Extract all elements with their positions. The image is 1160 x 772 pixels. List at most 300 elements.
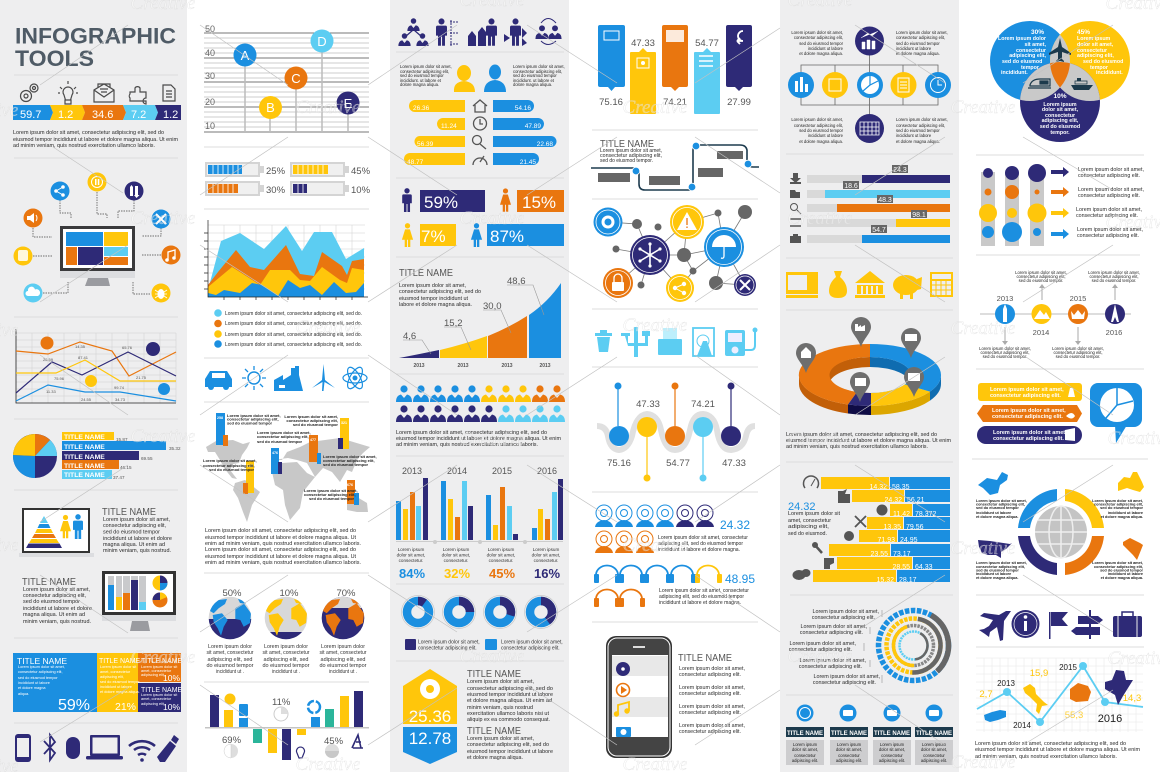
icon: woman	[454, 65, 475, 92]
text block: ad minim veniam, quis nostrud exercitation ullamco laboris.	[786, 444, 928, 450]
text block: enim ad minim veniam, quis nostrud exercitation ullamco laboris.	[205, 541, 361, 547]
globe 10%: sit amet, consectetur	[262, 650, 310, 656]
map line chart: 2,7	[979, 689, 993, 700]
text block: intro: Lorem ipsum dolor sit amet, consectetur adipiscing elit, sed do	[13, 130, 164, 136]
process path timeline	[591, 139, 759, 191]
four title name cards: adipiscing elit.	[879, 758, 905, 763]
bubble column chart with arrows: consectetur adipiscing elit.	[1078, 193, 1140, 199]
globe 10%	[262, 588, 310, 675]
text block: hexagon titles: eiusmod tempor incididunt ut labore	[467, 692, 553, 698]
panel: gender comparison bars: 47.89	[525, 123, 541, 130]
globe with country maps: Lorem ipsum dolor sit amet,	[976, 499, 1027, 503]
org chart: consectetur adipiscing elit,	[896, 123, 945, 128]
panel: gender comparison bars: dolore magna aliqua.	[400, 82, 439, 87]
venn diagram: 10%	[1053, 93, 1067, 100]
batteries: 10%	[351, 185, 371, 196]
growth area chart: 2013	[457, 363, 469, 369]
pictogram: webcams: adipiscing elit, sed do eiusmod tempor	[658, 541, 743, 547]
world map with bars: Lorem ipsum dolor sit amet,	[257, 430, 311, 435]
grouped bar chart 2013-2016: consectetur.	[399, 558, 423, 563]
panel: people percentage bars: 87%	[490, 227, 524, 246]
bubble lollipop chart: D	[317, 34, 327, 49]
text block: sed do eiusmod tempor	[23, 599, 80, 605]
batteries	[205, 162, 371, 196]
globe 10%: Lorem ipsum dolor	[264, 644, 308, 650]
globe with country maps: et dolore magna aliqua.	[1101, 515, 1143, 519]
text block: hexagon titles: et dolore magna aliqua.	[467, 755, 523, 761]
text block: minim veniam, quis nostrud.	[103, 548, 171, 554]
panel: gender comparison bars: 22.68	[537, 141, 553, 148]
map line chart: 2015	[1059, 663, 1077, 672]
panel: gender comparison bars: sed do eiusmod tempor	[513, 73, 557, 78]
org chart: Lorem ipsum dolor sit amet,	[791, 30, 843, 35]
growth area chart: 30,0	[483, 301, 502, 312]
text block: incididunt ut labore et dolore	[23, 606, 92, 612]
area chart	[204, 220, 368, 348]
icons: house, clock, search, gauge	[472, 100, 487, 165]
snake timeline: 75.16	[607, 458, 631, 469]
banners: Lorem ipsum dolor sit amet,	[992, 408, 1066, 414]
line chart: 26.59	[43, 357, 54, 362]
world map with bars: 321	[341, 421, 347, 425]
globe with country maps: consectetur adipiscing elit,	[976, 502, 1025, 506]
venn diagram: adipiscing elit,	[1009, 53, 1047, 59]
text block: Lorem ipsum dolor sit amet,	[103, 517, 170, 523]
location pins	[796, 317, 924, 402]
pictogram: headphones: adipiscing elit, sed do eiusmod tempor	[659, 594, 744, 600]
growth area chart: 48,6	[507, 276, 526, 287]
stacked comparison bars: 73.17	[893, 551, 911, 558]
org chart: sed do eiusmod tempor	[896, 128, 940, 133]
text block: phone: Lorem ipsum dolor sit amet,	[679, 723, 745, 729]
bubble lollipop chart: 40	[205, 48, 215, 58]
venn diagram: consectetur	[1016, 48, 1046, 54]
four title name cards: consectetur	[881, 753, 903, 758]
horizontal range bars: 98.1	[912, 212, 926, 219]
banners: consectetur adipiscing elit.	[992, 414, 1063, 420]
stacked comparison bars	[788, 476, 950, 584]
four title name cards: TITLE NAME	[787, 731, 823, 737]
text block: hexagon titles: Lorem ipsum dolor sit amet,	[467, 736, 534, 742]
horizontal timeline: sed do eiusmod tempor.	[1056, 354, 1100, 359]
horizontal timeline: 2014	[1033, 328, 1049, 337]
legend: Lorem ipsum dolor sit amet, consectetur adipiscing elit, sed do.	[225, 311, 362, 317]
horizontal timeline	[979, 270, 1140, 359]
map: USA	[978, 540, 1012, 558]
hexagon badge: 25.36	[409, 707, 451, 726]
watermark marks: Creative	[296, 97, 360, 118]
bubble column chart with arrows: consectetur adipiscing elit.	[1077, 233, 1139, 239]
3D donut chart	[796, 317, 941, 415]
panel: five column cards: 54.77	[695, 38, 719, 49]
globe with country maps: et dolore magna aliqua.	[976, 576, 1018, 580]
line chart: 14.35	[75, 344, 86, 349]
diverging bar chart: 11%	[272, 697, 291, 708]
venn diagram: adipiscing elit,	[1077, 53, 1114, 59]
pictogram: webcams: Lorem ipsum dolor sit amet, consectetur	[658, 535, 748, 541]
org chart	[788, 26, 951, 144]
stacked comparison bars: 28.55	[892, 564, 910, 571]
map line chart: 55,3	[1065, 710, 1083, 721]
globe 70%	[320, 588, 367, 675]
chevron bar: key values	[13, 105, 181, 121]
pictogram: headphones: incididunt ut labore et dolore magna.	[659, 600, 741, 606]
icons: finance row	[786, 271, 953, 299]
growth area chart: 2013	[413, 363, 425, 369]
text block: phone: Lorem ipsum dolor sit amet,	[679, 666, 745, 672]
text block: Lorem ipsum dolor sit amet, consectetur adipiscing elit, sed do	[786, 432, 937, 438]
batteries: 30%	[266, 185, 286, 196]
watermark marks: Creative	[460, 429, 524, 450]
globe 50%: do eiusmod tempor	[206, 663, 254, 669]
panel: treemap	[13, 653, 183, 714]
grouped bar chart 2013-2016: consectetur.	[534, 558, 558, 563]
watermark marks: Creative	[788, 208, 852, 229]
panel: people percentage bars	[402, 188, 564, 247]
stacked comparison bars: 56.21	[907, 497, 925, 504]
bubble column chart with arrows: consectetur adipiscing elit.	[1076, 213, 1138, 219]
text block: intro	[13, 130, 178, 149]
map: India	[1105, 670, 1133, 705]
node: umbrella	[704, 227, 744, 267]
panel: treemap: 59%	[58, 697, 90, 714]
stacked comparison bars: 24.95	[900, 537, 918, 544]
text block: hexagon titles: eiusmod tempor incididunt ut labore	[467, 749, 553, 755]
watermark marks: Creative	[460, 208, 524, 229]
panel: treemap: TITLE NAME	[99, 658, 141, 665]
org chart: Lorem ipsum dolor sit amet,	[896, 30, 948, 35]
globe 70%: incididunt ut .	[329, 669, 357, 675]
globe with country maps: et dolore magna aliqua.	[976, 515, 1018, 519]
globe with country maps: incididunt ut labore	[1108, 572, 1143, 576]
watermark marks: Creative	[788, 429, 852, 450]
watermark marks: Creative	[131, 426, 195, 447]
text block	[23, 587, 92, 625]
arrows	[1051, 167, 1069, 239]
text block: Lorem ipsum dolor sit amet, consectetur adipiscing elit, sed do	[205, 547, 356, 553]
globe 70%: sit amet, consectetur	[320, 650, 367, 656]
globe ring	[1018, 489, 1104, 575]
process path timeline: TITLE NAME	[600, 139, 654, 150]
pie chart with title bars: TITLE NAME	[64, 444, 105, 451]
world map with bars: consectetur adipiscing elit,	[286, 418, 338, 423]
icon: pause	[88, 172, 106, 192]
globe with country maps: incididunt ut labore	[976, 511, 1011, 515]
globe with country maps: consectetur adipiscing elit,	[1094, 502, 1143, 506]
legend: Lorem ipsum dolor sit amet,	[418, 640, 480, 646]
panel: treemap: 10%	[163, 702, 180, 712]
icons: energy row	[205, 364, 367, 391]
venn diagram: sed do eiusmod	[1040, 124, 1080, 130]
panel: treemap: aliqua.	[18, 692, 29, 696]
map: Italy	[1023, 684, 1048, 714]
stacked comparison bars: 15.32	[876, 577, 894, 584]
org chart: consectetur adipiscing elit,	[794, 35, 843, 40]
grouped bar chart 2013-2016: 2016	[537, 466, 557, 476]
icon: share	[50, 182, 70, 200]
panel: gender comparison bars: 56.39	[417, 141, 434, 148]
globe with country maps: et dolore magna aliqua.	[1101, 576, 1143, 580]
grouped bar chart 2013-2016: Lorem ipsum	[533, 547, 559, 552]
panel: gender comparison bars: 26.36	[413, 105, 430, 112]
map: Russia	[984, 710, 1006, 722]
text block: enim ad minim veniam, quis nostrud exercitation ullamco laboris.	[205, 560, 361, 566]
bubble lollipop chart	[204, 24, 369, 132]
org chart: incididunt ut labore	[808, 133, 844, 138]
org chart: consectetur adipiscing elit,	[794, 123, 843, 128]
horizontal timeline: Lorem ipsum dolor sit amet,	[1088, 270, 1140, 275]
globe with country maps: sed do eiusmod tempor	[976, 568, 1019, 572]
world map with bars: consectetur adipiscing elit,	[304, 492, 356, 497]
globe 70%: do eiusmod tempor	[320, 663, 367, 669]
map line chart: 14,3	[1123, 693, 1141, 704]
panel: title and key figures	[13, 24, 181, 158]
map: China	[978, 472, 1008, 495]
bubble lollipop chart: C	[291, 71, 301, 86]
icons: people network row	[398, 18, 562, 46]
banners	[977, 383, 1142, 444]
grouped bar chart 2013-2016: dolor sit amet,	[487, 552, 515, 558]
panel: gender comparison bars: 11.24	[441, 123, 457, 130]
venn diagram: dolor sit amet,	[1077, 42, 1114, 48]
snake timeline	[597, 382, 755, 482]
panel: laptop with pyramid	[19, 507, 172, 557]
watermark marks: Creative	[951, 97, 1015, 118]
panel: gender comparison bars: consectetur adipiscing elit,	[400, 69, 449, 74]
text block: incididunt ut labore et dolore	[103, 536, 172, 542]
watermark marks: Creative	[623, 315, 687, 336]
bubble column chart with arrows: Lorem ipsum dolor sit amet,	[1077, 227, 1143, 233]
radial segmented chart: consectetur adipiscing elit.	[813, 680, 876, 686]
chevron bar: key values: 59.7	[20, 109, 41, 121]
text block: magna aliqua. Ut enim ad	[23, 612, 85, 618]
bubble lollipop chart: 10	[205, 121, 215, 131]
world map with bars: consectetur adipiscing elit,	[323, 458, 375, 463]
text block: consectetur adipiscing elit,	[23, 593, 86, 599]
text block: phone: Lorem ipsum dolor sit amet,	[679, 704, 745, 710]
horizontal timeline: sed do eiusmod tempor.	[1092, 278, 1136, 283]
grouped bar chart 2013-2016: 45%	[489, 566, 515, 581]
org chart: et dolore magna aliqua.	[896, 51, 940, 56]
pictogram: headphones: 48.95	[725, 572, 755, 586]
panel: treemap: incididunt ut labore	[18, 681, 50, 685]
panel: gender comparison bars: 21.45	[520, 159, 536, 166]
panel: treemap: 21%	[115, 701, 136, 713]
text block: hexagon titles: minim veniam, quis nostrud	[467, 705, 533, 711]
snake timeline: 54.77	[666, 458, 690, 469]
heading: TITLE NAME	[22, 577, 76, 588]
panel: gender comparison bars: dolore magna aliqua.	[513, 82, 552, 87]
grouped bar chart 2013-2016: Lorem ipsum	[488, 547, 514, 552]
globe with country maps: incididunt ut labore	[1108, 511, 1143, 515]
panel: treemap: et dolore magna aliqua.	[100, 690, 140, 694]
legend: Lorem ipsum dolor sit amet, consectetur adipiscing elit, sed do.	[225, 342, 362, 348]
process path timeline: sed do eiusmod tempor.	[600, 158, 653, 164]
world map with bars: 477	[310, 438, 316, 442]
monitor	[60, 226, 135, 286]
watermark marks: Creative	[296, 317, 360, 338]
horizontal timeline: sed do eiusmod tempor.	[983, 354, 1027, 359]
horizontal timeline: Lorem ipsum dolor sit amet,	[1052, 346, 1104, 351]
phone mockup	[606, 636, 672, 758]
icon: bug	[152, 284, 170, 302]
stacked comparison bars: amet, consectetur	[788, 518, 831, 524]
horizontal timeline: 2015	[1070, 294, 1086, 303]
world map with bars	[203, 413, 377, 566]
four title name cards: Lorem ipsum	[837, 742, 862, 747]
org chart: Lorem ipsum dolor sit amet,	[896, 117, 948, 122]
panel: treemap: 10%	[163, 673, 180, 683]
four title name cards: dolor sit amet,	[921, 747, 947, 752]
pictogram: webcams	[595, 505, 750, 553]
grouped bar chart 2013-2016	[396, 466, 563, 581]
globe 50%: adipiscing elit, sed	[208, 657, 253, 663]
people pictogram grid: ad minim veniam, quis nostrud exercitation ullamco laboris.	[396, 442, 538, 448]
horizontal timeline: consectetur adipiscing elit,	[1016, 274, 1066, 279]
globe with country maps: Lorem ipsum dolor sit amet,	[1092, 499, 1143, 503]
horizontal range bars: 24.3	[893, 167, 907, 174]
icons: devices row	[15, 734, 179, 762]
bubble lollipop chart: 30	[205, 71, 215, 81]
panel: gender comparison bars: Lorem ipsum dolor sit amet,	[513, 64, 565, 69]
line chart: 24.55	[81, 397, 92, 402]
diverging bar chart	[205, 691, 369, 760]
bubble lollipop chart: 20	[205, 97, 215, 107]
stacked comparison bars: 13.35	[883, 524, 901, 531]
world map with bars: sed do eiusmod tempor	[227, 420, 273, 426]
world map with bars: 476	[272, 451, 278, 455]
horizontal timeline: sed do eiusmod tempor.	[1019, 278, 1063, 283]
growth area chart: 2013	[539, 363, 551, 369]
chevron bar: key values: 7.2	[131, 109, 146, 121]
panel: gender comparison bars: Lorem ipsum dolor sit amet,	[400, 64, 452, 69]
globe with country maps: Lorem ipsum dolor sit amet,	[976, 561, 1027, 565]
venn diagram: tempor	[1021, 65, 1039, 71]
legend: Lorem ipsum dolor sit amet, consectetur adipiscing elit, sed do.	[225, 321, 362, 327]
venn diagram: Lorem ipsum	[1043, 102, 1077, 108]
map line chart: 2016	[1098, 713, 1122, 725]
pictogram: headphones: Lorem ipsum dolor sit amet, consectetur	[659, 588, 749, 594]
text block: hexagon titles: exercitation ullamco laboris nisi ut	[467, 711, 549, 717]
bubble column chart with arrows: Lorem ipsum dolor sit amet,	[1078, 187, 1144, 193]
map: Australia	[1118, 472, 1144, 492]
watermark marks: Creative	[951, 538, 1015, 559]
org chart: et dolore magna aliqua.	[896, 139, 940, 144]
radial segmented chart: consectetur adipiscing elit.	[789, 647, 852, 653]
world map with bars: sed do eiusmod tempor	[309, 496, 355, 501]
horizontal range bars	[790, 165, 950, 243]
watermark marks: Creative	[951, 318, 1015, 339]
icon: transfer	[124, 182, 144, 200]
pictogram: webcams: incididunt ut labore et dolore magna.	[658, 547, 740, 553]
growth area chart: 4,6	[403, 331, 416, 342]
stacked comparison bars: sed do eiusmod.	[788, 531, 827, 537]
venn diagram: sit amet,	[1024, 42, 1047, 48]
panel: treemap: Lorem ipsum dolor sit	[141, 665, 178, 669]
monitor	[102, 571, 176, 631]
panel: five column cards: 75.16	[599, 97, 623, 108]
radial segmented chart: Lorem ipsum dolor sit amet,	[800, 624, 867, 630]
text block: hexagon titles: consectetur adipiscing elit, sed do	[467, 686, 553, 692]
venn diagram: consectetur	[1045, 113, 1075, 119]
org chart: sed do eiusmod tempor	[799, 128, 844, 133]
pie chart with title bars: TITLE NAME	[64, 472, 105, 479]
grouped bar chart 2013-2016: 2015	[492, 466, 512, 476]
grouped bar chart 2013-2016: dolor sit amet,	[442, 552, 470, 558]
text block: magna aliqua. Ut enim ad	[103, 542, 165, 548]
outer wall	[799, 375, 941, 415]
text block: Lorem ipsum dolor sit amet,	[23, 587, 90, 593]
speech bubble with pie	[1090, 383, 1142, 443]
world map with bars: Lorem ipsum dolor sit amet,	[203, 458, 257, 463]
globe 70%: adipiscing elit, sed	[320, 657, 366, 663]
text block: consectetur adipiscing elit,	[103, 523, 166, 529]
connectors	[33, 192, 171, 294]
text block: hexagon titles: aliquip ex ea commodo consequat.	[467, 717, 550, 723]
stacked comparison bars: 71.93	[877, 537, 895, 544]
bubble column chart with arrows	[979, 164, 1144, 246]
globe with country maps: sed do eiusmod tempor	[976, 506, 1019, 510]
panel: treemap: sed do eiusmod tempor	[100, 680, 140, 684]
icons: line tools row	[20, 81, 175, 104]
grouped bar chart 2013-2016: 32%	[444, 566, 470, 581]
venn diagram: Lorem ipsum dolor	[998, 36, 1046, 42]
panel: gender comparison bars: 54.16	[515, 105, 531, 112]
panel: treemap: adipiscing elit	[141, 673, 165, 677]
text block: minim veniam, quis nostrud.	[23, 619, 91, 625]
four title name cards: TITLE NAME	[874, 731, 910, 737]
panel: treemap: amet, consectetur	[141, 697, 172, 701]
hexagon badge: 12.78	[409, 729, 451, 748]
pie chart with title bars: TITLE NAME	[64, 463, 105, 470]
legend: Lorem ipsum dolor sit amet, consectetur adipiscing elit, sed do.	[225, 332, 362, 338]
map line chart: ad minim veniam, quis nostrud exercitation ullamco laboris.	[975, 754, 1117, 760]
pie chart with title bars: 46.15	[120, 465, 132, 470]
horizontal timeline: consectetur adipiscing elit,	[980, 350, 1030, 355]
panel: treemap: adipiscing elit	[141, 702, 165, 706]
panel: five column cards: 47.33	[631, 38, 655, 49]
panel: treemap: sed do eiusmod tempor	[18, 676, 58, 680]
node: tools	[734, 274, 756, 296]
venn diagram: incididunt.	[1001, 70, 1028, 76]
grouped bar chart 2013-2016: dolor sit amet,	[397, 552, 425, 558]
icons: light blue tools row	[595, 327, 758, 357]
globe 70%: Lorem ipsum dolor	[321, 644, 365, 650]
globe with country maps	[976, 472, 1144, 580]
four title name cards: Lorem ipsum	[880, 742, 905, 747]
line chart	[16, 329, 176, 403]
people pictogram grid: eiusmod tempor incididunt ut labore et dolore magna aliqua. Ut enim	[396, 436, 561, 442]
line chart: 75.96	[54, 376, 65, 381]
stacked comparison bars: 23.55	[870, 551, 888, 558]
stacked comparison bars: 58.35	[892, 484, 910, 491]
network diagram	[594, 205, 756, 302]
world map with bars: consectetur adipiscing elit,	[257, 434, 309, 439]
node: lock	[603, 268, 633, 298]
line chart: 87.41	[78, 355, 89, 360]
venn diagram: sed do eiusmod	[1002, 59, 1042, 65]
venn diagram: sed do eiusmod	[1083, 59, 1123, 65]
horizontal timeline: consectetur adipiscing elit,	[1053, 350, 1103, 355]
map: Brazil	[1123, 538, 1143, 560]
text block: hexagon titles: TITLE NAME	[467, 669, 521, 680]
batteries: 45%	[351, 166, 371, 177]
line chart: 65.76	[122, 345, 133, 350]
stacked comparison bars: 14.32	[869, 484, 887, 491]
growth area chart	[399, 268, 561, 369]
icons	[792, 476, 888, 580]
icon: speaker	[24, 208, 42, 228]
